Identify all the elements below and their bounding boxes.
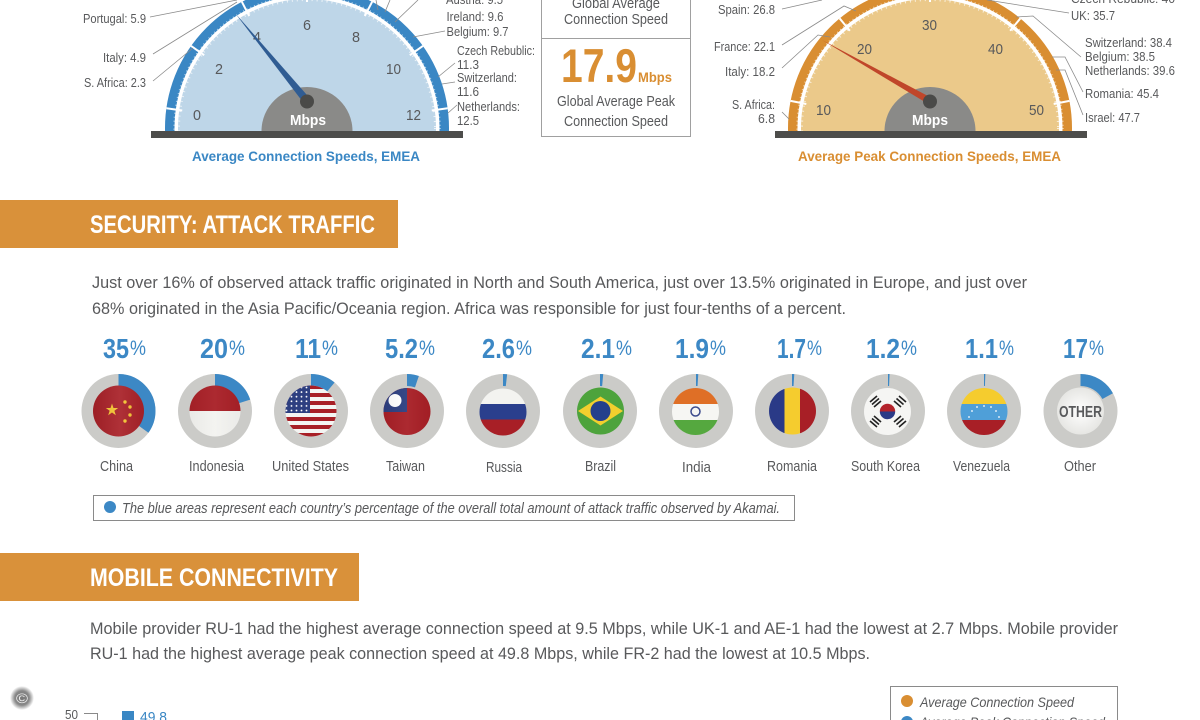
item: India: 1.9 (675, 333, 709, 364)
item: Other: Other (1064, 458, 1096, 475)
heading: security attack traffic: SECURITY: ATTACK TRAFFIC (90, 211, 375, 239)
icon: copyright badge: © (16, 690, 29, 706)
peak gauge country labels: Spain: 26.8 (718, 2, 775, 17)
item: Venezuela: Venezuela (953, 458, 1011, 475)
peak gauge title: Average Peak Connection Speeds, EMEA (798, 148, 1061, 164)
item: India: India (682, 459, 712, 476)
heading: mobile connectivity: MOBILE CONNECTIVITY (90, 564, 338, 592)
gauge scale numbers: 2 (215, 61, 223, 78)
item: Other: 17 (1063, 333, 1088, 364)
peak gauge country labels: Romania: 45.4 (1085, 86, 1159, 101)
item: China: % (130, 337, 146, 360)
text block: attack traffic summary (92, 273, 1027, 318)
item: China (82, 333, 156, 475)
gauge scale numbers: 6 (303, 17, 311, 34)
gauge: average peak connection speeds EMEA (714, 0, 1174, 164)
gauge scale numbers: 10 (386, 61, 401, 78)
peak gauge needle (822, 40, 932, 104)
gauge hub (262, 87, 352, 131)
flag: South Korea (864, 388, 911, 435)
gauge country labels: 11.3 (457, 57, 479, 72)
flag: Taiwan (383, 388, 431, 436)
icon: copyright badge (10, 686, 34, 710)
item: Indonesia: 20 (200, 333, 228, 364)
gauge needle (235, 13, 310, 104)
peak gauge country labels (714, 0, 1175, 126)
item: Other: OTHER (1059, 404, 1102, 421)
peak gauge country labels: Netherlands: 39.6 (1085, 63, 1175, 78)
heading: security attack traffic (0, 200, 398, 248)
peak gauge country labels: Belgium: 38.5 (1085, 49, 1155, 64)
gauge country labels: Italy: 4.9 (103, 50, 146, 65)
peak gauge scale numbers: 30 (922, 17, 937, 34)
item: Romania: % (807, 337, 822, 360)
item: India (659, 333, 733, 476)
item: Russia: % (516, 337, 532, 360)
panel: global averages: Connection Speed (564, 113, 668, 130)
text block: attack traffic summary: 68% originated in the Asia Pacific/Oceania region. Africa was responsible for just four-tenths of a percent. (92, 299, 846, 318)
peak gauge scale numbers: 40 (988, 41, 1003, 58)
item: Venezuela: 1.1 (965, 333, 998, 364)
text block: mobile summary: RU-1 had the highest average peak connection speed at 49.8 Mbps, while FR-2 had the lowest at 10.5 Mbps. (90, 644, 870, 663)
item: Other: % (1089, 337, 1104, 360)
peak gauge country labels: 6.8 (758, 111, 775, 126)
item: South Korea: % (901, 337, 917, 360)
text block: attack traffic summary: Just over 16% of observed attack traffic originated in North and South America, just over 13.5% originated in Europe, and just over (92, 273, 1027, 292)
item: China: 35 (103, 333, 129, 364)
callout: blue area legend: The blue areas represent each country’s percentage of the overall total amount of attack traffic observed by Akamai. (122, 500, 780, 517)
item: Indonesia: % (229, 337, 245, 360)
peak gauge leader lines (782, 0, 1083, 119)
peak gauge scale numbers (816, 17, 1044, 119)
item: Romania: 1.7 (777, 333, 806, 364)
item: South Korea: 1.2 (866, 333, 900, 364)
panel: global averages: Mbps (638, 69, 672, 85)
gauge country labels: Switzerland: (457, 70, 517, 85)
item: Brazil (563, 333, 637, 475)
item: Brazil: 2.1 (581, 333, 615, 364)
peak gauge country labels: S. Africa: (732, 97, 775, 112)
item: China: China (100, 458, 134, 475)
gauge country labels: 12.5 (457, 113, 479, 128)
item: Russia: Russia (486, 459, 523, 476)
item: Taiwan (370, 333, 444, 475)
item: Taiwan: 5.2 (385, 333, 418, 364)
peak gauge country labels: France: 22.1 (714, 39, 775, 54)
item: Brazil: % (616, 337, 632, 360)
panel: global averages: Global Average Peak (557, 93, 675, 110)
gauge scale numbers: 4 (253, 29, 261, 46)
gauge scale numbers: 12 (406, 107, 421, 124)
bar chart: mobile speeds (partial) (65, 707, 167, 720)
gauge: average connection speeds EMEA (84, 0, 534, 164)
item: India: % (710, 337, 726, 360)
text block: mobile summary (90, 619, 1118, 663)
peak gauge country labels: Israel: 47.7 (1085, 110, 1140, 125)
item: Indonesia: Indonesia (189, 458, 245, 475)
gauge: average connection speeds EMEA: Mbps (290, 112, 326, 129)
peak gauge scale numbers: 20 (857, 41, 872, 58)
item: Russia (466, 333, 540, 476)
global average peak value: 17.9 (561, 39, 637, 92)
flag: Indonesia (190, 386, 240, 436)
peak gauge country labels: UK: 35.7 (1071, 8, 1115, 23)
item: United States: % (322, 337, 338, 360)
item: United States (272, 333, 349, 475)
peak gauge scale numbers: 50 (1029, 102, 1044, 119)
peak gauge country labels: Italy: 18.2 (725, 64, 775, 79)
flag: India (672, 388, 720, 436)
item: Venezuela (947, 333, 1021, 475)
item: Taiwan: % (419, 337, 435, 360)
item: Taiwan: Taiwan (386, 458, 425, 475)
peak gauge country labels: Switzerland: 38.4 (1085, 35, 1172, 50)
item: United States: United States (272, 458, 349, 475)
gauge country labels: Ireland: 9.6 (446, 9, 504, 24)
panel: global averages: Connection Speed (564, 11, 668, 28)
gauge title: Average Connection Speeds, EMEA (192, 148, 420, 164)
item: Russia: 2.6 (482, 333, 515, 364)
item: Other (1044, 333, 1118, 475)
flag: Romania (769, 387, 817, 435)
legend: mobile chart: Average Connection Speed (919, 694, 1075, 710)
item: Indonesia (178, 333, 252, 475)
heading: mobile connectivity (0, 553, 359, 601)
item: Romania: Romania (767, 458, 818, 475)
item: United States: 11 (295, 333, 321, 364)
gauge scale numbers: 0 (193, 107, 201, 124)
item: South Korea (851, 333, 925, 475)
item: Venezuela: % (999, 337, 1014, 360)
text block: mobile summary: Mobile provider RU-1 had the highest average connection speed at 9.5 Mbps, while UK-1 and AE-1 had the lowest at 2.7 Mbps. Mobile provider (90, 619, 1118, 638)
item: South Korea: South Korea (851, 458, 921, 475)
gauge leader lines (150, 0, 457, 113)
item: Brazil: Brazil (585, 458, 616, 475)
item: Romania (755, 333, 829, 475)
flag: Russia (479, 388, 527, 436)
gauge scale numbers: 8 (352, 29, 360, 46)
callout: blue area legend (94, 496, 794, 520)
flag: China (93, 386, 144, 436)
gauge country labels: Czech Rebublic: (457, 43, 535, 58)
legend: mobile chart (890, 686, 1118, 720)
gauge country labels: S. Africa: 2.3 (84, 75, 146, 90)
peak gauge scale numbers: 10 (816, 102, 831, 119)
flag: United States (285, 385, 337, 437)
gauge country labels (83, 0, 535, 128)
gauge country labels: Portugal: 5.9 (83, 11, 146, 26)
gauge country labels: Netherlands: (457, 99, 520, 114)
flag: Venezuela (960, 388, 1008, 436)
panel: global averages (542, 0, 690, 136)
gauge country labels: Belgium: 9.7 (446, 24, 508, 39)
gauge country labels: 11.6 (457, 84, 479, 99)
gauge scale numbers (193, 17, 421, 124)
peak gauge hub (884, 87, 976, 131)
flag: Brazil (577, 387, 625, 435)
gauge: average peak connection speeds EMEA: Mbps (912, 112, 948, 129)
